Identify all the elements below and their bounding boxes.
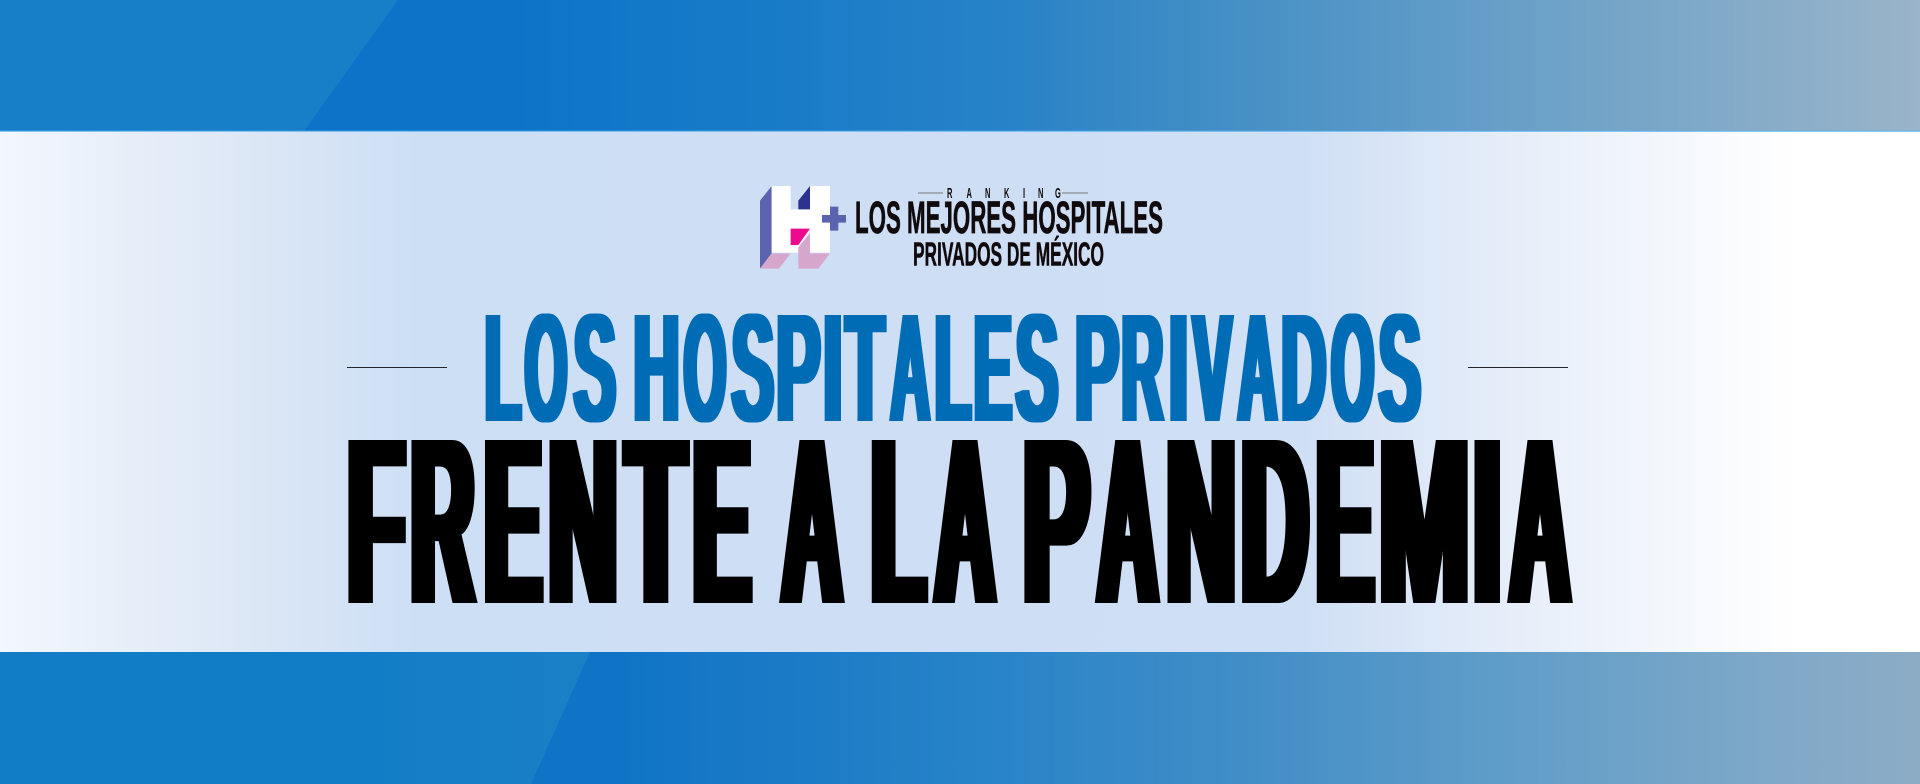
headline line 1: L: [485, 282, 521, 454]
headline line 1: A: [891, 282, 930, 454]
headline line 1: I: [823, 282, 843, 454]
headline line 2: E: [485, 389, 541, 654]
left rule: [347, 367, 447, 368]
headline line 2: D: [1241, 389, 1308, 654]
headline line 1: H: [633, 282, 680, 454]
headline line 2: A: [936, 389, 995, 654]
headline line 2: P: [1023, 389, 1089, 654]
headline line 1: O: [525, 282, 567, 454]
headline line 1: S: [574, 282, 616, 454]
bottom blue band: [0, 652, 1920, 784]
icon: H plus: [760, 186, 846, 269]
headline line 1: R: [1121, 282, 1163, 454]
headline line 1: A: [1238, 282, 1277, 454]
headline line 1: P: [1075, 282, 1119, 454]
headline line 1: S: [1379, 282, 1421, 454]
headline line 2: F: [348, 389, 405, 654]
headline line 1: P: [776, 282, 820, 454]
right rule: [1468, 367, 1568, 368]
headline line 1: E: [974, 282, 1012, 454]
headline line 1: [485, 282, 1422, 454]
middle band background: [0, 131, 1920, 652]
top blue band: [0, 0, 1920, 132]
headline line 2: E: [693, 389, 751, 654]
headline line 2: N: [549, 389, 617, 654]
logo: ranking los mejores hospitales: [760, 184, 1163, 273]
ranking side rules: [918, 192, 1088, 194]
headline line 1: T: [846, 282, 884, 454]
headline line 1: S: [1016, 282, 1058, 454]
headline line 2: A: [782, 389, 842, 654]
headline line 1: V: [1193, 282, 1232, 454]
headline line 2: A: [1510, 389, 1570, 654]
headline line 2: M: [1379, 389, 1469, 654]
headline line 2: N: [1167, 389, 1236, 654]
headline line 1: S: [732, 282, 774, 454]
headline line 1: D: [1281, 282, 1326, 454]
headline line 2: R: [411, 389, 474, 654]
ranking label: RANKING: [947, 184, 1061, 202]
headline line 1: I: [1169, 282, 1189, 454]
headline line 1: O: [684, 282, 726, 454]
headline line 2: [348, 389, 1573, 654]
headline line 1: L: [935, 282, 971, 454]
headline line 2: E: [1317, 389, 1374, 654]
headline line 1: O: [1331, 282, 1374, 454]
headline line 2: I: [1473, 389, 1501, 654]
headline line 2: T: [626, 389, 686, 654]
headline line 2: A: [1098, 389, 1157, 654]
headline line 2: L: [871, 389, 926, 654]
